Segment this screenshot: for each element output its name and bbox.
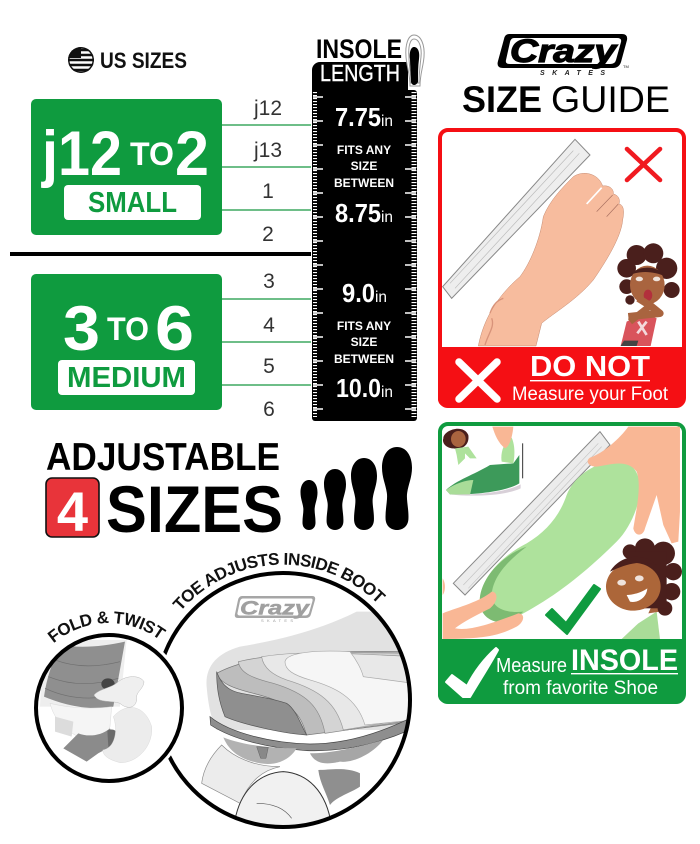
ruler readings: 10.0 <box>336 373 381 403</box>
banner: do not: Measure your Foot <box>512 384 669 405</box>
ruler readings: in <box>381 113 393 130</box>
heading: US sizes: US SIZES <box>100 48 187 73</box>
illustration: boot toe cross-section <box>202 612 413 827</box>
illustration: ruler and foot <box>443 139 624 346</box>
size labels: j13 <box>253 139 282 162</box>
icon: red cross <box>627 149 660 180</box>
heading: adjustable 4 sizes: ADJUSTABLE <box>46 436 280 479</box>
banner: measure insole: Measure <box>496 655 567 677</box>
banner: do not <box>438 347 685 407</box>
ruler readings: 8.75 <box>335 198 381 228</box>
heading: US sizes <box>68 47 187 73</box>
panel: medium size badge: 3 <box>63 294 100 364</box>
banner: measure insole <box>438 639 685 703</box>
icon: green check <box>546 585 600 634</box>
icon: nested insoles <box>406 35 424 86</box>
ruler readings: 7.75 <box>335 102 381 132</box>
illustration: skate wheel and toe stop <box>40 640 152 763</box>
ruler readings: in <box>381 209 393 226</box>
badge: number 4: 4 <box>57 480 88 543</box>
icon: four insole silhouettes <box>300 447 412 530</box>
panel: small size badge <box>31 99 222 235</box>
title: size guide: SIZE <box>462 79 542 120</box>
size labels: 2 <box>262 223 274 246</box>
heading: insole length: LENGTH <box>320 60 400 86</box>
heading: adjustable 4 sizes: SIZES <box>106 472 283 546</box>
logo: Crazy Skates: TM <box>623 64 629 69</box>
icon: US flag <box>68 47 94 73</box>
panel: small size badge: TO <box>130 136 174 172</box>
ruler readings: in <box>375 289 387 306</box>
circle: toe adjusts inside boot <box>156 573 413 827</box>
badge: number 4 <box>46 478 99 543</box>
banner: do not: DO NOT <box>530 351 650 383</box>
size labels: 1 <box>262 180 274 203</box>
size labels: 3 <box>263 270 275 293</box>
ruler readings: 9.0 <box>342 278 375 308</box>
banner: measure insole: from favorite Shoe <box>503 678 658 699</box>
panel: medium size badge: MEDIUM <box>67 362 186 394</box>
title: size guide <box>462 79 670 120</box>
curved label: fold and twist: FOLD & TWIST <box>47 611 166 643</box>
logo: Crazy Skates: SKATES <box>540 70 605 77</box>
logo: grey Crazy Skates: SKATES <box>261 618 293 623</box>
illustration: shocked kid <box>617 243 680 346</box>
heading: insole length: INSOLE <box>316 34 402 64</box>
heading: insole length <box>316 34 402 86</box>
panel: small size badge: j12 <box>41 119 122 189</box>
illustration: smiling kid <box>606 538 682 639</box>
size labels: j12 <box>253 97 282 120</box>
size labels: 6 <box>263 398 275 421</box>
logo: grey Crazy Skates: Crazy <box>240 598 311 620</box>
ruler readings: SIZE <box>351 335 377 349</box>
panel: measure insole from favorite shoe <box>438 424 685 703</box>
panel: do not measure your foot <box>438 130 685 407</box>
panel: small size badge: 2 <box>175 119 209 189</box>
size labels <box>253 97 282 421</box>
ruler readings: in <box>381 384 393 401</box>
ruler readings: SIZE <box>351 159 377 173</box>
logo: Crazy Skates <box>498 33 629 77</box>
ruler: insole length <box>312 34 424 421</box>
curved label: toe adjusts inside boot: TOE ADJUSTS INSIDE BOOT <box>172 553 386 609</box>
panel: medium size badge <box>31 274 222 410</box>
logo: grey Crazy Skates <box>235 596 315 623</box>
panel: medium size badge: TO <box>107 311 149 347</box>
ruler readings: BETWEEN <box>334 352 394 366</box>
banner: measure insole: INSOLE <box>571 644 678 677</box>
size labels: 4 <box>263 314 275 337</box>
circle: fold and twist <box>31 630 187 786</box>
ruler readings: FITS ANY <box>337 143 391 157</box>
title: size guide: GUIDE <box>551 79 670 120</box>
illustration: shoe with kid <box>443 427 523 496</box>
panel: small size badge: SMALL <box>88 187 177 219</box>
logo: Crazy Skates: Crazy <box>510 33 619 69</box>
ruler readings <box>334 102 394 403</box>
ruler readings: FITS ANY <box>337 319 391 333</box>
size labels: 5 <box>263 355 275 378</box>
heading: adjustable 4 sizes <box>46 436 283 546</box>
ruler readings: BETWEEN <box>334 176 394 190</box>
divider bar <box>10 252 311 256</box>
size connector lines <box>222 125 311 385</box>
panel: medium size badge: 6 <box>155 294 194 364</box>
illustration: ruler, insole and hands <box>443 427 680 639</box>
